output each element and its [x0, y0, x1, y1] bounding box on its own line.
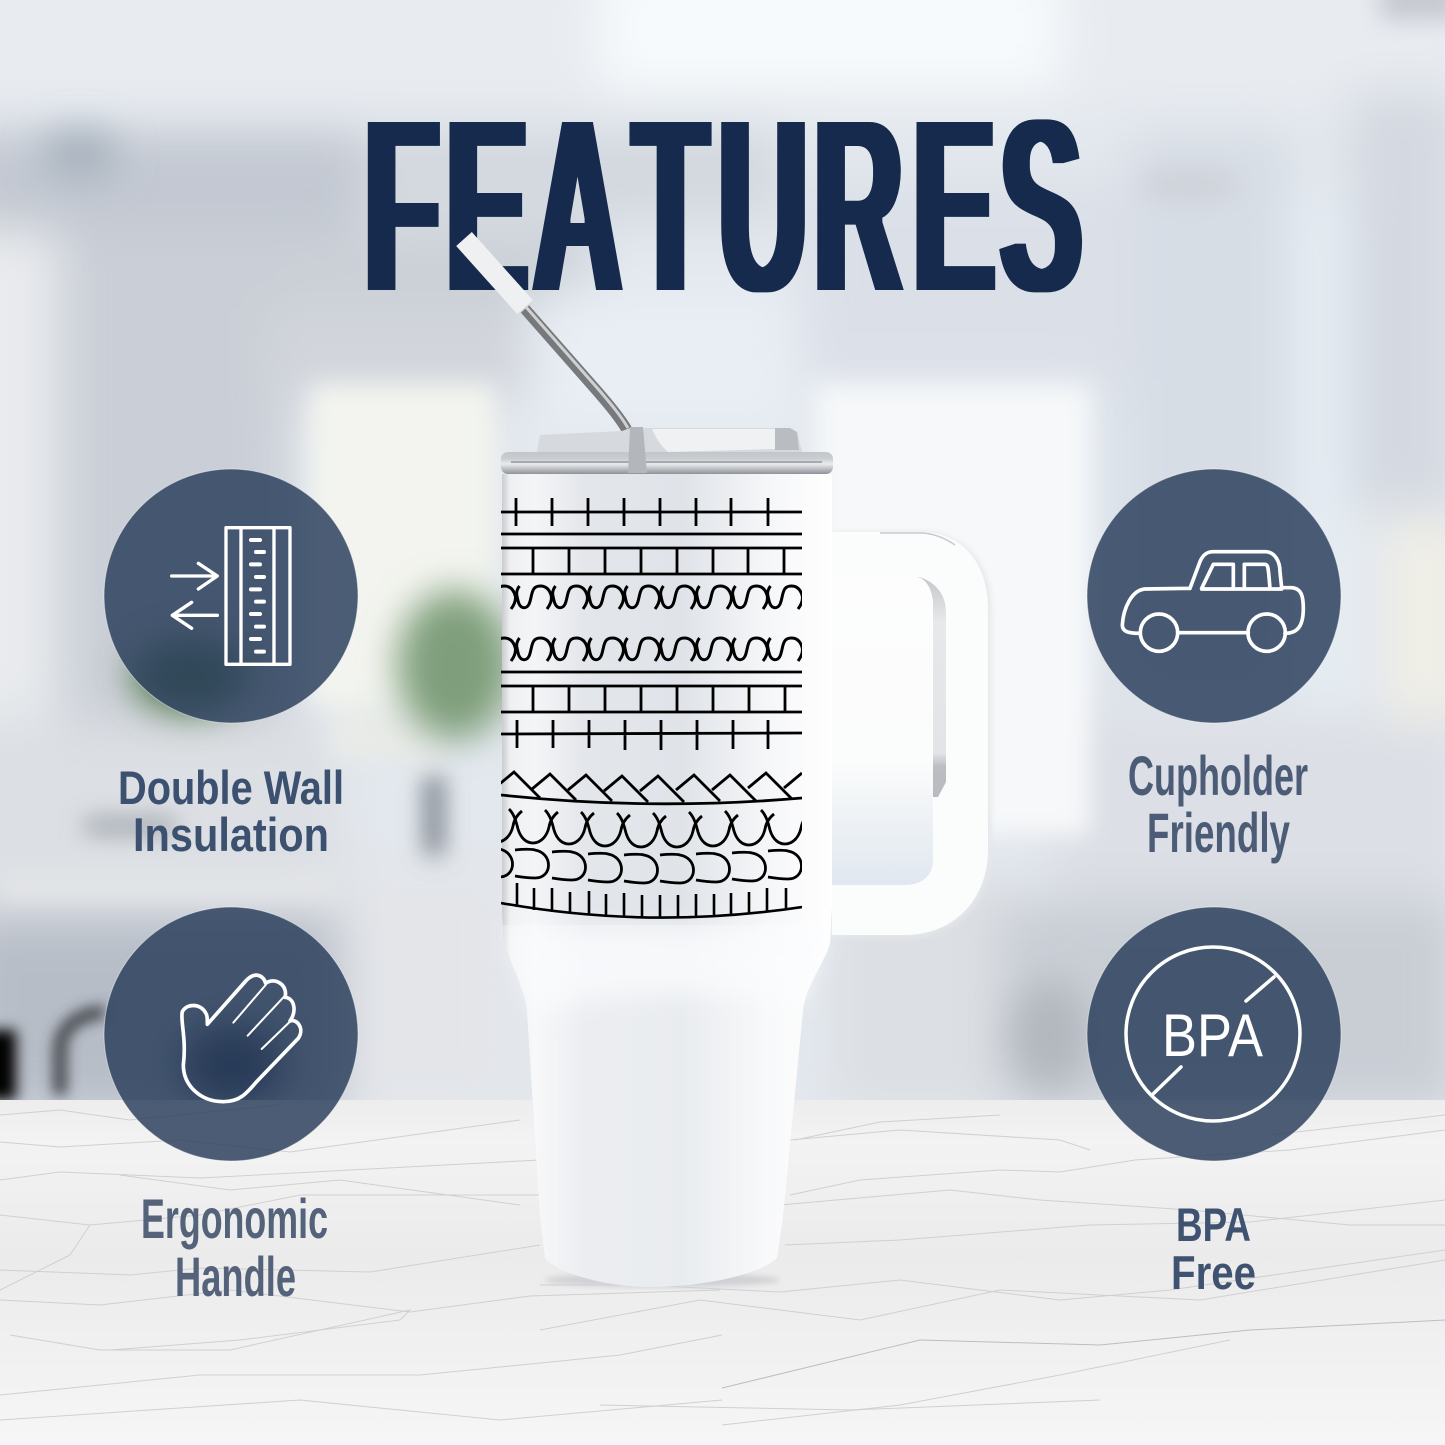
- icon circle: cupholder friendly: [1087, 469, 1341, 723]
- body: [502, 474, 832, 1287]
- row: hooks: [479, 848, 802, 883]
- row: crosses: [501, 498, 802, 526]
- row: bricks: [501, 534, 802, 574]
- row: triangles: [496, 772, 802, 804]
- handle: [832, 532, 991, 938]
- straw: [464, 239, 628, 430]
- lid: [501, 427, 833, 474]
- marble table: [0, 1100, 1445, 1445]
- label: cupholder friendly: Cupholder: [1128, 744, 1308, 807]
- label: double wall insulation: Insulation: [133, 808, 329, 861]
- label: BPA free: [1171, 1198, 1256, 1299]
- icon circle: ergonomic handle: [104, 907, 358, 1161]
- label: cupholder friendly: [1128, 744, 1308, 864]
- title: FEATURES: [365, 66, 1082, 345]
- label: cupholder friendly: Friendly: [1147, 801, 1290, 864]
- row: comb: [501, 883, 802, 918]
- label: ergonomic handle: Handle: [175, 1245, 296, 1308]
- row: crosses 2: [501, 720, 802, 750]
- lower body lightening: [502, 925, 832, 1287]
- row: arcs: [473, 808, 810, 847]
- label: BPA free: BPA: [1176, 1198, 1251, 1251]
- tumbler shadow: [544, 1273, 780, 1287]
- icon circle: double wall insulation: [104, 469, 358, 723]
- row: waves: [481, 586, 802, 609]
- shoulder highlight: [510, 930, 825, 1015]
- row: waves 2: [481, 638, 802, 661]
- icon circle: BPA free: [1087, 907, 1341, 1161]
- label: double wall insulation: [118, 761, 344, 861]
- pattern: [501, 498, 802, 919]
- blurred room background: [0, 0, 1445, 1115]
- tumbler: [473, 427, 991, 1287]
- label: ergonomic handle: [141, 1187, 328, 1308]
- label: double wall insulation: Double Wall: [118, 761, 344, 814]
- label: BPA free: Free: [1171, 1246, 1256, 1299]
- label: ergonomic handle: Ergonomic: [141, 1187, 328, 1250]
- icon circle: BPA free: BPA: [1162, 1002, 1263, 1069]
- row: bricks 2: [501, 672, 802, 712]
